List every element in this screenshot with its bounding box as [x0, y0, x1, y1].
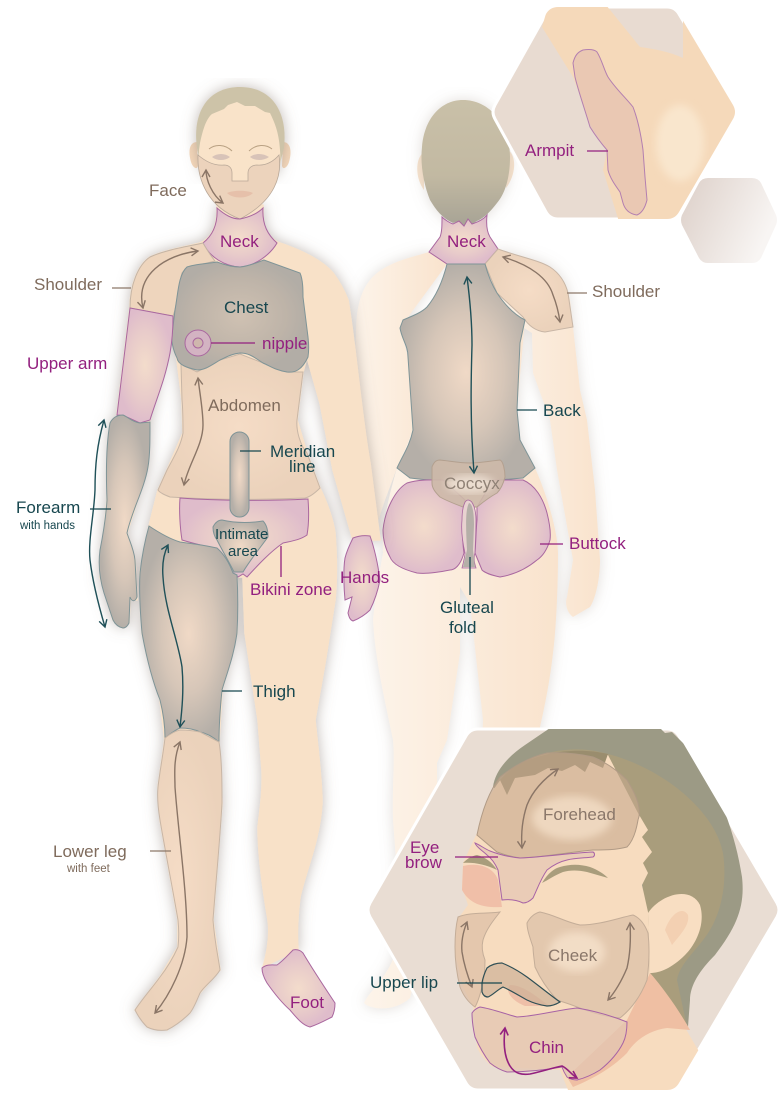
- zone: hand: [344, 536, 380, 621]
- label: neck back: Neck: [447, 232, 486, 251]
- arrow: lower leg: [155, 742, 187, 1013]
- arrow: thigh: [163, 545, 183, 727]
- label: abdomen: Abdomen: [208, 396, 281, 415]
- leader: back: [517, 409, 537, 411]
- label: cheek: Cheek: [548, 946, 598, 965]
- small decorative hexagon: [681, 178, 777, 263]
- arrow: shoulder: [142, 251, 198, 308]
- label: lower leg: Lower leg: [53, 842, 127, 861]
- label: eyebrow: Eye: [410, 838, 439, 857]
- label: buttock: Buttock: [569, 534, 626, 553]
- label: intimate area second row: area: [228, 543, 259, 560]
- back of head hair: [421, 100, 510, 226]
- inset background: [368, 729, 779, 1090]
- hair: [196, 87, 285, 175]
- zone: nipple: [185, 330, 211, 356]
- label: meridian line: Meridian: [270, 442, 335, 461]
- back body skin silhouette: [355, 249, 600, 1008]
- ear: [648, 894, 702, 973]
- leader: shoulder: [112, 287, 131, 289]
- leader: shoulder back: [567, 292, 587, 294]
- label: thigh: Thigh: [253, 682, 296, 701]
- label: face: Face: [149, 181, 187, 200]
- back zone: back: [397, 264, 535, 481]
- label: chin: Chin: [529, 1038, 564, 1057]
- zone: shoulder: [130, 243, 215, 316]
- eyes: [212, 154, 269, 160]
- zone: armpit: [573, 50, 647, 215]
- face and neck skin: [455, 755, 700, 1095]
- fold outline: [462, 500, 476, 568]
- zone: thigh: [140, 526, 238, 742]
- arrow: left cheek: [462, 922, 472, 987]
- leader: buttock: [540, 543, 563, 545]
- zone: forehead: [477, 753, 640, 858]
- label: armpit: Armpit: [525, 141, 574, 160]
- label: gluteal fold second row: fold: [449, 618, 476, 637]
- label: meridian line second row: line: [289, 457, 315, 476]
- label: intimate area: Intimate: [215, 526, 268, 543]
- leader: meridian line: [240, 450, 261, 452]
- label: gluteal fold: Gluteal: [440, 598, 494, 617]
- zone: face: [198, 155, 280, 219]
- zone: forearm with hand: [99, 415, 150, 628]
- zone: chest: [172, 260, 309, 372]
- zone: meridian line: [230, 432, 249, 517]
- inner hair: [552, 750, 724, 1024]
- zone: upper lip: [482, 963, 560, 1006]
- back shoulder arrow: [503, 257, 560, 322]
- arrow: face: [206, 170, 223, 203]
- leader: nipple: [211, 342, 255, 344]
- leader: forearm: [90, 508, 111, 510]
- right eyebrow: [542, 865, 608, 883]
- forehead glow: [532, 796, 612, 840]
- label: upper lip: Upper lip: [370, 973, 438, 992]
- label: forehead: Forehead: [543, 805, 616, 824]
- face hexagon inset: [368, 728, 779, 1095]
- hairline forehead: [500, 751, 608, 795]
- lips: [227, 191, 253, 198]
- labels: [16, 181, 660, 1057]
- zone: eyebrow: [475, 843, 594, 903]
- head illustration: [455, 728, 743, 1095]
- back zone: neck: [429, 215, 498, 264]
- back zone: right buttock: [475, 480, 550, 577]
- arrow: abdomen: [184, 378, 203, 485]
- mouth shade: [508, 985, 550, 1006]
- zone: chin: [472, 1007, 627, 1080]
- leader: lower leg: [150, 850, 171, 852]
- zone: neck: [203, 208, 277, 267]
- left eyebrow: [463, 855, 497, 870]
- zone: cheek: [527, 912, 649, 1018]
- leader: bikini zone: [280, 546, 282, 577]
- inset body: [542, 7, 735, 219]
- label: upper arm: Upper arm: [27, 354, 107, 373]
- head with hair: [189, 87, 291, 219]
- leader: armpit: [587, 150, 608, 152]
- inner ear: [665, 911, 688, 945]
- zone: abdomen: [158, 354, 320, 499]
- cheek glow: [549, 932, 605, 972]
- back zone: coccyx: [432, 460, 505, 507]
- leader: thigh: [222, 690, 242, 692]
- ears: [189, 142, 291, 168]
- zone: lower leg with foot: [135, 730, 222, 1030]
- back zone: left buttock: [383, 480, 465, 573]
- arrow: forearm: [90, 420, 105, 627]
- eyebrows: [209, 145, 272, 151]
- label: eyebrow second row: brow: [405, 853, 443, 872]
- label: shoulder: Shoulder: [34, 275, 102, 294]
- front body skin silhouette: [100, 205, 380, 1030]
- leader: eyebrow: [455, 856, 498, 858]
- label: bikini zone: Bikini zone: [250, 580, 332, 599]
- coccyx glow: [446, 475, 494, 493]
- front body figure: [90, 87, 380, 1030]
- back zone: shoulder: [485, 249, 573, 332]
- back arrow: [467, 277, 474, 473]
- gluteal fold leader line: [469, 557, 471, 595]
- fold core: [463, 503, 475, 567]
- face: [199, 102, 280, 219]
- label: foot: Foot: [290, 993, 324, 1012]
- label: shoulder back: Shoulder: [592, 282, 660, 301]
- label: coccyx: Coccyx: [444, 474, 500, 493]
- back body figure: [355, 100, 600, 1008]
- back zone: gluteal fold: [462, 500, 476, 568]
- label: nipple: nipple: [262, 334, 307, 353]
- outer hair: [493, 728, 743, 1027]
- label: chest: Chest: [224, 298, 269, 317]
- leader: upper lip: [457, 982, 502, 984]
- eye-side shade: [462, 865, 502, 907]
- arrow: forehead: [522, 769, 558, 848]
- label: with feet: with feet: [66, 863, 111, 875]
- zone: upper arm: [117, 308, 173, 423]
- inset background: [493, 7, 735, 219]
- label: back: Back: [543, 401, 581, 420]
- arrow: cheek: [608, 923, 630, 1000]
- arrow: chin: [504, 1028, 577, 1078]
- armpit hexagon inset: [492, 7, 735, 219]
- label: neck: Neck: [220, 232, 259, 251]
- ears: [417, 150, 514, 190]
- zone: foot: [262, 950, 335, 1027]
- neck shadow: [567, 973, 690, 1087]
- zone: intimate area: [213, 520, 268, 572]
- label: forearm: Forearm: [16, 498, 80, 517]
- label: hands: Hands: [340, 568, 389, 587]
- zone: left cheek: [455, 912, 500, 1007]
- zone: bikini: [180, 498, 309, 577]
- label: with hands: with hands: [19, 520, 75, 532]
- arrows: [90, 170, 223, 1013]
